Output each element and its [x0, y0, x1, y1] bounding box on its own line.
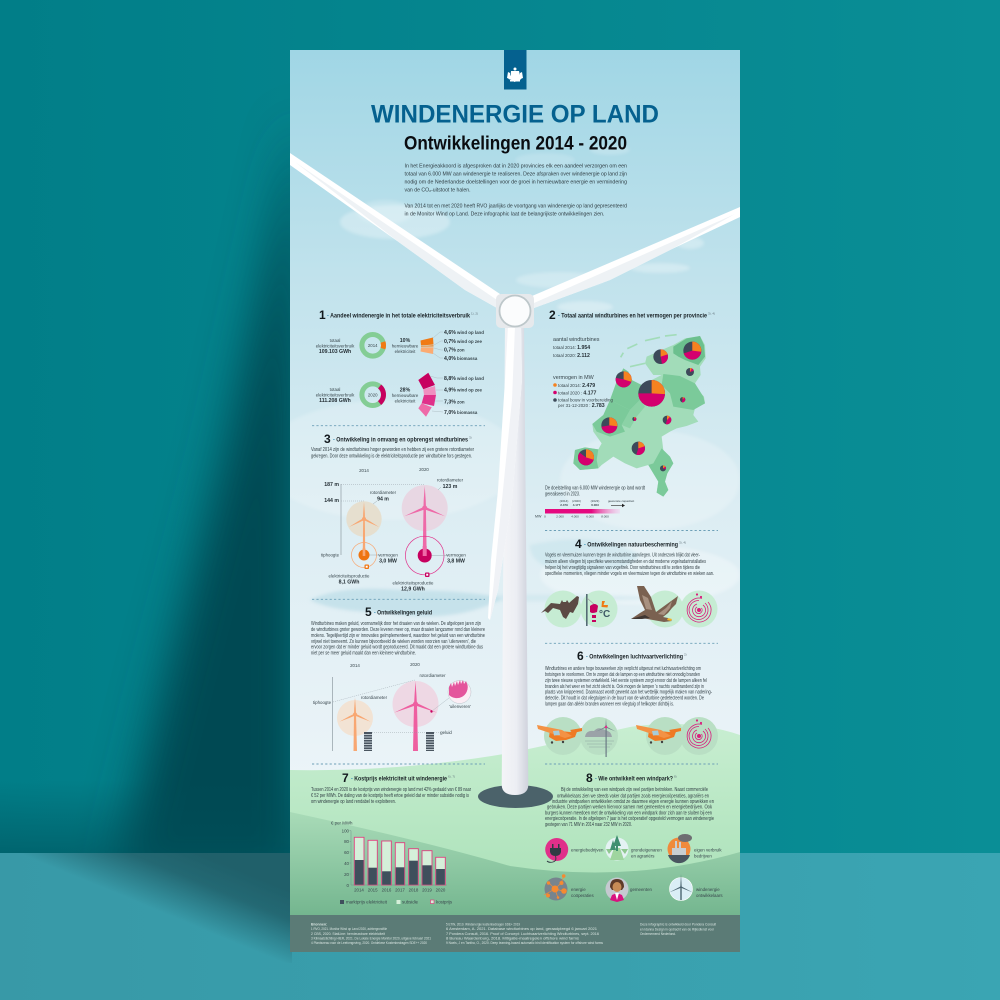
text 7: Tussen 2014 en 2020 is de kostprijs van windenergie op land met 42% gedaald van € 89 naar — [311, 787, 471, 793]
heading 3: - Ontwikkeling in omvang en opbrengst windturbines — [333, 436, 468, 444]
turbine 3 labels: rotordiameter — [370, 490, 397, 495]
labels left: elektriciteitsverbruik — [316, 392, 355, 398]
bar chart: 2020 — [436, 888, 446, 892]
donut 2020 — [357, 379, 388, 410]
heading 6: 6 — [577, 649, 584, 663]
target text — [545, 486, 645, 498]
turbine 3 labels: elektriciteitsproductie — [392, 580, 434, 586]
intro text: in de Monitor Wind op Land. Deze infographic laat de belangrijkste ontwikkelingen zien. — [404, 212, 604, 218]
label — [696, 887, 723, 898]
panel 4: nature protection — [541, 537, 718, 628]
footer credits: Deze infographic is ontwikkeld door Pondera Consult — [640, 922, 716, 926]
footer sources: 8 Bureau Waardenburg, 2018. Mitigatie-maatregelen offshore wind farms — [446, 936, 579, 940]
text 6: lampen gaan dan alléén branden wanneer een vliegtuig of helikopter dichtbij is. — [545, 702, 674, 708]
heading 8 — [586, 771, 677, 785]
poster shadow on wall — [0, 149, 290, 853]
footer band — [290, 915, 740, 952]
blade left — [290, 153, 500, 308]
intro text: totaal van 6.000 MW aan windenergie te realiseren. Deze afspraken over windenergie op land zijn — [404, 172, 627, 178]
heading 6: 2) — [684, 652, 687, 656]
heading 7: 6), 7) — [448, 774, 455, 778]
poster shadow on floor — [0, 853, 292, 963]
capacity scale bar: 6.063 — [591, 503, 599, 507]
bar chart: 2019 — [422, 888, 432, 892]
Limburg — [648, 448, 673, 497]
upper hill — [290, 724, 740, 872]
text 6: detectie. Dit houdt in dat vliegtuigen in de buurt van de windturbine gedetecteerd worden. De — [545, 696, 704, 702]
label: energie — [571, 887, 586, 892]
icon: pole and temperature: °C — [599, 609, 610, 620]
label: en agrariërs — [631, 854, 655, 858]
capacity scale bar: 2.000 — [556, 514, 564, 518]
footer sources: 7 Pondera Consult, 2016. Proof of Concept: Luchtvaartverlichting Windturbines, sept. 2016 — [446, 932, 599, 936]
blade right shade — [534, 214, 735, 308]
donut 2014 — [359, 332, 386, 359]
footer sources: 4 Planbureau voor de Leefomgeving, 2020. Ontdekme Kostenbedragen SDE++ 2020 — [311, 941, 427, 945]
panel 5: noise — [311, 605, 485, 751]
heading 2: - Totaal aantal windturbines en het vermogen per provincie — [558, 312, 707, 320]
panel 1: share of wind energy — [316, 308, 484, 417]
panel 2: turbines and capacity per province — [535, 308, 715, 518]
text 7: € 52 per MWh. De daling van de kostprijs heeft ertoe geleid dat er minder subsidie nodig is — [311, 793, 469, 799]
intro text: Van 2014 tot en met 2020 heeft RVO jaarlijks de voortgang van windenergie op land gepresenteerd — [404, 204, 627, 210]
bar chart: 80 — [344, 839, 350, 844]
labels left: 109.103 GWh — [319, 349, 351, 355]
icon: plane — [636, 725, 681, 744]
heading 7: - Kostprijs elektriciteit uit windenergie — [351, 776, 447, 782]
text 5: Windturbines maken geluid, voornamelijk door het draaien van de wieken. De afgelopen jaren zijn — [311, 621, 481, 627]
icon: energy companies — [545, 838, 568, 862]
text 8: ontwikkelaars zien we steeds vaker dat partijen zoals energiecoöperaties, agrariërs en — [557, 793, 709, 799]
icon: radar — [687, 594, 711, 622]
lower hill — [290, 812, 740, 915]
footer sources — [311, 922, 603, 945]
intro text — [404, 164, 627, 218]
turbine large — [392, 681, 438, 751]
label: coöperaties — [571, 893, 595, 898]
capacity legend: per 31-12-2020 : 2.783 — [558, 403, 605, 409]
heading 3: 3) — [469, 436, 472, 440]
panel 8: who develops a wind farm — [544, 771, 723, 902]
turbine 3 labels: vermogen — [446, 552, 466, 558]
text 5: molens. Tegelijkertijd zijn er innovaties geïmplementeerd, waardoor het geluid van een windturbine — [311, 633, 485, 639]
capacity scale bar: 4.000 — [571, 514, 579, 518]
heading 1: 1), 2) — [471, 312, 478, 316]
blade down shade — [490, 326, 522, 620]
capacity scale bar: gewenste capaciteit — [608, 499, 634, 503]
subtitle: Ontwikkelingen 2014 - 2020 — [404, 132, 627, 154]
text 6: zijn twee nieuwe systemen ontwikkeld. Het eerste systeem zorgt ervoor dat de lampen alleen fel — [545, 678, 707, 684]
target text: gerealiseerd in 2023. — [545, 492, 580, 498]
poster — [260, 50, 740, 952]
labels left: elektriciteit — [395, 398, 416, 404]
bar chart: 0 — [347, 883, 350, 888]
label: eigen verbruik — [694, 848, 722, 852]
turbine totals — [553, 337, 600, 359]
text 4: helpen bij het vroegtijdig signaleren van vogeltrek. Door windturbines stil te zetten tijdens die — [545, 565, 700, 571]
capacity legend — [553, 375, 613, 409]
Utrecht — [622, 400, 645, 428]
fan values: 0,7% zon — [444, 348, 465, 354]
bar chart: 60 — [344, 850, 350, 855]
capacity legend: vermogen in MW — [553, 375, 595, 381]
panel 7: cost price — [311, 771, 471, 905]
capacity scale bar: 2.479 — [560, 503, 568, 507]
turbine 3 labels: 8,1 GWh — [339, 580, 359, 586]
bar chart: 20 — [344, 872, 350, 877]
heading 8: 8 — [586, 771, 593, 785]
text 5: vrijwel niet toeneemt. Zo kunnen bijvoorbeeld de wieken worden voorzien van 'uilenveren', die — [311, 639, 476, 645]
text 7 — [311, 787, 471, 805]
Noord-Holland — [610, 368, 643, 410]
bar chart: € per MWh — [331, 820, 353, 826]
text 8: energiecoöperatie. In de afgelopen 7 jaar is het coöperatief opgesteld vermogen aan windenergie — [545, 816, 714, 822]
capacity scale bar: 4.177 — [573, 503, 581, 507]
labels 5: rotordiameter — [361, 695, 388, 700]
year labels and height axis: 2014 — [359, 468, 369, 473]
text 6: branden als het weer en het zicht slecht is. Ook mogen de lampen 's nachts vastbrandend zijn in — [545, 684, 704, 690]
sky — [290, 50, 740, 790]
heading 2 — [549, 308, 715, 322]
year labels and axis: tiphoogte — [313, 700, 332, 705]
heading 7: 7 — [342, 771, 349, 785]
heading 2: 2 — [549, 308, 556, 322]
footer sources: 3 Klimaatstichting HIER, 2021. De Lokale Energie Monitor 2020, uitgave februari 2021 — [311, 936, 431, 940]
blade left shade — [295, 162, 497, 308]
footer credits — [640, 922, 716, 936]
intro text: van de CO₂-uitstoot te halen. — [404, 188, 470, 194]
bar chart: 100 — [342, 828, 350, 834]
icon: owl feather detail — [432, 680, 471, 711]
heading 5: - Ontwikkelingen geluid — [374, 610, 432, 616]
bar chart: 2017 — [395, 888, 405, 892]
heading 1 — [319, 308, 478, 322]
turbine 3 labels: 94 m — [377, 496, 389, 502]
labels left: 10% — [400, 338, 411, 344]
text 4 — [545, 552, 714, 577]
intro text: nodig om de Nederlandse doelstellingen voor de groei in hernieuwbare energie en vermindering — [404, 180, 627, 186]
text 6 — [545, 666, 712, 708]
footer sources: 2 CBS, 2020. StatLine: hernieuwbare elektriciteit — [311, 932, 385, 936]
icon circles row — [544, 590, 718, 628]
Zeeland — [573, 447, 598, 470]
text 5: de windturbines groter geworden. Deze leveren meer op, maar draaien langzamer rond dan kleinere — [311, 627, 485, 633]
heading 1: - Aandeel windenergie in het totale elektriciteitsverbruik — [327, 312, 470, 320]
turbine 2014 — [346, 501, 382, 569]
pie charts per province — [578, 342, 701, 471]
map of the Netherlands — [573, 335, 706, 497]
heading 1: 1 — [319, 308, 326, 322]
labels left: 111.208 GWh — [319, 398, 351, 404]
text 8: gebruiken. Deze partijen werken hiervoor samen met gemeenten en energiebedrijven. Ook — [547, 804, 712, 810]
heading 7 — [342, 771, 455, 785]
icon: coat of arms — [507, 68, 523, 82]
icon: radar — [687, 720, 711, 748]
bar chart — [331, 820, 453, 905]
intro text: In het Energieakkoord is afgesproken dat in 2020 provincies elk een aandeel verzorgen om een — [404, 164, 627, 170]
heading 5 — [365, 605, 432, 619]
labels left: hernieuwbare — [392, 393, 419, 398]
icon: own-use companies — [668, 834, 692, 863]
labels 5 — [361, 673, 471, 735]
year labels and height axis: tiphoogte — [321, 552, 340, 558]
noise bars — [364, 732, 444, 751]
Zuid-Holland — [592, 400, 630, 437]
capacity scale bar: 0 — [544, 514, 546, 518]
blade right — [532, 207, 740, 308]
text 6: botsingen te voorkomen. Om te zorgen dat de lampen op een windturbine niet onnodig branden — [545, 672, 700, 678]
text 3 — [311, 447, 474, 460]
label: gemeenten — [630, 887, 653, 892]
capacity scale bar: (2014) — [560, 499, 568, 503]
fan values: 8,8% wind op land — [444, 376, 484, 382]
text 3: Vanaf 2014 zijn de windturbines hoger geworden en hebben zij een grotere rotordiameter — [311, 447, 474, 453]
fan values: 4,6% wind op land — [444, 330, 484, 336]
capacity scale bar: (2020) — [572, 499, 581, 503]
icon: energy cooperatives — [544, 874, 568, 900]
capacity scale bar — [535, 499, 634, 518]
label: bedrijven — [694, 854, 712, 858]
label: windenergie — [696, 887, 720, 892]
footer credits: en Idanna Design in opdracht van de Rijksdienst voor — [640, 928, 715, 932]
turbine base shadow — [478, 785, 553, 808]
heading 6 — [577, 649, 687, 663]
labels 5: geluid — [440, 730, 452, 735]
blade down — [488, 326, 522, 620]
year labels and axis: 2014 — [350, 663, 360, 668]
bar chart: 2015 — [368, 888, 378, 892]
panel 3: size and yield of turbines — [311, 432, 474, 592]
icon: wind developers — [669, 874, 693, 900]
fan values: 7,0% biomassa — [444, 410, 478, 416]
Overijssel — [662, 374, 705, 410]
turbine totals: aantal windturbines — [553, 337, 600, 343]
text 8: burgers kunnen meedoen met de ontwikkeling van een windpark door zich aan te sluiten bij een — [545, 810, 712, 816]
turbine 3 labels: vermogen — [378, 552, 398, 558]
fan values: 4,9% wind op zee — [444, 388, 482, 394]
text 8: Bij de ontwikkeling van een windpark zijn veel partijen betrokken. Naast commerciële — [561, 787, 708, 793]
capacity scale bar: 8.000 — [601, 514, 609, 518]
heading 4 — [575, 537, 686, 551]
capacity scale bar: (2023) — [591, 499, 599, 503]
footer sources: 1 RVO, 2021. Monitor Wind op Land 2020, achtergrondfile — [311, 927, 387, 931]
text 6: Windturbines en andere hoge bouwwerken zijn verplicht uitgerust met luchtvaartverlichting om — [545, 666, 701, 672]
bar chart: 2014 — [354, 888, 364, 892]
text 8: industrie windparken ontwikkelen omdat ze daarmee eigen energie kunnen opwekken en — [552, 799, 714, 805]
footer sources: 9 Noels, J en Tantha, O., 2020. Deep learning-based automatic bird identification system for offshore wind farms — [446, 941, 603, 945]
icon: municipalities — [606, 878, 628, 902]
year labels and height axis: 2020 — [419, 467, 429, 472]
bar chart: 2018 — [409, 888, 419, 892]
turbine totals: totaal 2014: 1.954 — [553, 345, 590, 351]
text 3: gekregen. Door deze ontwikkeling is de elektriciteitsproductie per windturbine fors gestegen. — [311, 454, 472, 460]
bar chart: 2016 — [382, 888, 392, 892]
target text: De doelstelling van 6.000 MW windenergie op land wordt — [545, 486, 645, 492]
year labels and axis: 2020 — [410, 662, 420, 667]
turbine tower — [502, 320, 528, 795]
fan values — [444, 330, 484, 416]
labels left: elektriciteitsverbruik — [316, 344, 355, 348]
heading 4: - Ontwikkelingen natuurbescherming — [584, 542, 678, 548]
footer sources: 5 ETIN, 2019. Windenergie kostenbedragen SDE+ 2019 — [446, 922, 520, 926]
labels left: totaal — [330, 338, 340, 343]
turbine small — [337, 698, 373, 751]
fan values: 7,3% zon — [444, 400, 465, 406]
text 4: Vogels en vleermuizen kunnen tegen de windturbine aanvliegen. Uit onderzoek blijkt dat vleer- — [545, 552, 700, 558]
turbine 3 labels: 3,0 MW — [379, 558, 397, 564]
text 5: ervoor zorgen dat er minder geluid wordt geproduceerd. Dit maakt dat een grotere windturbine dus — [311, 645, 483, 651]
year labels and height axis: 144 m — [324, 498, 339, 504]
text 4: muizen alleen vliegen bij specifieke weersomstandigheden en dat moderne vogelradarinstallaties — [545, 559, 706, 565]
chart legend — [340, 900, 453, 905]
logo Rijksoverheid — [504, 50, 526, 90]
blue haze band — [310, 539, 655, 616]
text 6: plaats van knipperend. Daarnaast wordt gewerkt aan het wettelijk mogelijk maken van nadering- — [545, 690, 712, 696]
clouds — [260, 145, 740, 605]
turbine 3 labels: rotordiameter — [437, 478, 464, 482]
bar chart: 40 — [344, 861, 350, 866]
label: energiebedrijven — [571, 848, 604, 852]
text 8: gestegen van 71 MW in 2014 naar 232 MW in 2020. — [545, 822, 632, 828]
turbine totals: totaal 2020: 2.112 — [553, 353, 590, 359]
icon: landowners and farmers — [606, 835, 628, 860]
wind turbine — [290, 153, 740, 808]
title: WINDENERGIE OP LAND — [371, 101, 659, 129]
labels 5: 'uilenveren' — [449, 704, 471, 709]
labels 5: rotordiameter — [419, 673, 446, 678]
text 7: om windenergie op land rendabel te exploiteren. — [311, 799, 396, 805]
footer sources: 6 Amsterdam, A. 2021. Database windturbines op land, geraadpleegd 6 januari 2021 — [446, 927, 597, 931]
footer credits: Ondernemend Nederland. — [640, 932, 676, 936]
donut 2020: 2020 — [368, 392, 378, 397]
capacity legend: totaal 2014: 2.479 — [558, 383, 595, 389]
labels left: 28% — [400, 388, 411, 394]
chart legend: subsidie — [402, 900, 419, 905]
labels left: hernieuwbare — [392, 344, 419, 348]
label — [631, 848, 662, 858]
fan 2014 — [420, 332, 443, 358]
heading 4: 3), 4) — [679, 540, 686, 544]
text 4: specifieke momenten, vliegen minder vogels en vleermuizen tegen de windturbine en wieken aan. — [545, 571, 714, 577]
map silhouette — [573, 336, 706, 497]
turbine 3 labels: elektriciteitsproductie — [328, 574, 370, 578]
donut 2014: 2014 — [368, 343, 378, 348]
heading 8: 8) — [674, 774, 677, 778]
Wadden islands — [621, 335, 677, 367]
icon circles row — [544, 717, 718, 755]
footer sources: Bronnen: — [311, 922, 327, 926]
label: ontwikkelaars — [696, 893, 723, 898]
text 5 — [311, 621, 485, 656]
Groningen — [673, 336, 705, 365]
labels left: totaal — [330, 387, 340, 392]
icon: eagle — [631, 586, 678, 622]
heading 8: - Wie ontwikkelt een windpark? — [595, 776, 673, 782]
panel 6: aviation lighting — [537, 649, 718, 757]
fan 2020 — [418, 373, 443, 417]
labels left: elektriciteit — [395, 349, 416, 354]
heading 3 — [324, 432, 472, 446]
fan values: 4,0% biomassa — [444, 356, 478, 362]
icon: turbine in bad weather — [585, 718, 616, 757]
text 8 — [545, 787, 714, 828]
heading 3: 3 — [324, 432, 331, 446]
heading 6: - Ontwikkelingen luchtvaartverlichting — [586, 654, 683, 660]
turbine 3 labels — [328, 478, 466, 592]
label — [694, 848, 722, 858]
chart legend: kostprijs — [436, 900, 453, 905]
hub — [496, 294, 534, 328]
turbine 2020 — [402, 485, 448, 577]
capacity scale bar: 6.000 — [586, 514, 594, 518]
chart legend: marktprijs elektriciteit — [346, 900, 388, 905]
icon: bat — [541, 596, 579, 619]
heading 2: 3), 4) — [708, 312, 715, 316]
heading 5: 5 — [365, 605, 372, 619]
turbine 3 labels: 3,8 MW — [447, 558, 465, 564]
icon: plane — [537, 725, 582, 744]
icon: pole and temperature — [586, 594, 610, 626]
labels left — [316, 338, 419, 404]
year labels and height axis: 187 m — [324, 482, 339, 488]
turbine 3 labels: 123 m — [443, 484, 458, 490]
background floor — [0, 853, 1000, 1000]
label: grondeigenaren — [631, 848, 662, 852]
year labels and axis — [313, 662, 420, 751]
fan values: 0,7% wind op zee — [444, 339, 482, 345]
capacity legend: totaal 2020 : 4.177 — [558, 390, 596, 396]
year labels and height axis — [321, 467, 429, 558]
text 5: niet per se meer geluid maakt dan een kleinere windturbine. — [311, 650, 416, 656]
turbine 3 labels: 12,9 GWh — [401, 586, 425, 592]
capacity scale bar: MW — [535, 514, 542, 518]
capacity legend: totaal bouw in voorbereiding — [558, 398, 613, 402]
label — [571, 887, 595, 898]
heading 4: 4 — [575, 537, 582, 551]
